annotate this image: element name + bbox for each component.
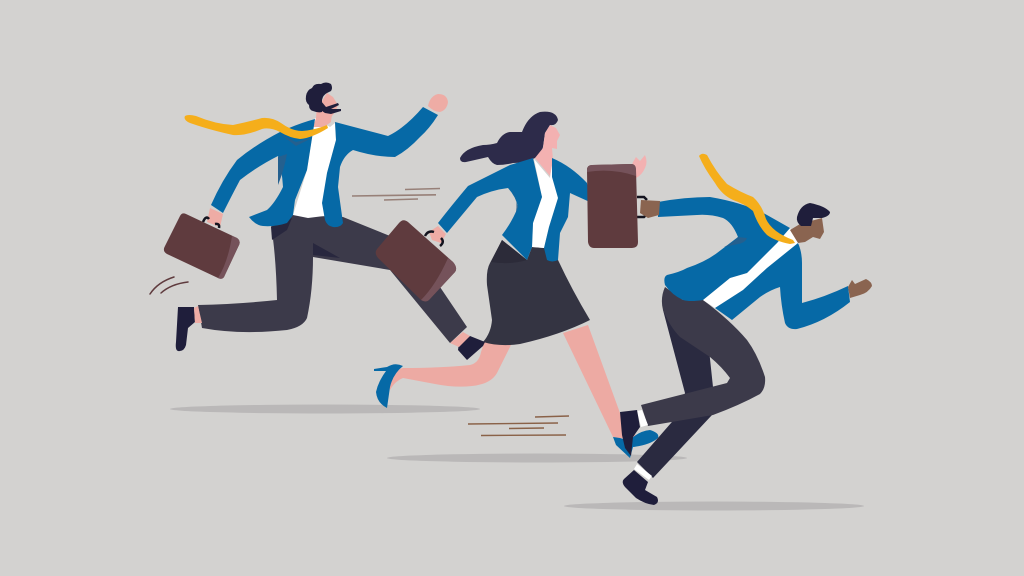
man one back shoe <box>176 307 195 351</box>
briefcase: woman <box>376 220 456 302</box>
figure: second man sprinting <box>620 154 872 505</box>
woman jacket right <box>544 158 592 262</box>
briefcase: second man <box>587 164 660 248</box>
man three sleeve fold <box>724 237 747 247</box>
man one head: face <box>318 93 338 122</box>
woman sleeve fold <box>512 188 518 218</box>
man three flying tie <box>699 154 795 244</box>
man one back ankle <box>194 306 202 323</box>
man one raised hand <box>428 94 448 112</box>
man one sleeve fold <box>278 154 287 185</box>
handle <box>637 197 647 217</box>
case <box>587 164 638 248</box>
man three lower sock <box>634 464 652 480</box>
man three front hand <box>848 279 872 298</box>
man one inner leg shade <box>313 243 340 258</box>
man three upper sock <box>637 410 648 427</box>
woman skirt <box>483 240 590 345</box>
man one neck <box>313 105 332 127</box>
woman hair <box>460 112 558 165</box>
man one ankle <box>450 332 470 347</box>
briefcase: first man <box>164 213 240 279</box>
man one trousers <box>198 215 467 343</box>
man one flying tie <box>185 115 328 139</box>
man three front leg <box>641 287 765 426</box>
woman front leg <box>563 325 637 440</box>
man one waist shade <box>271 218 292 240</box>
man three jacket lower and arm <box>715 243 850 329</box>
woman face and neck <box>535 125 560 176</box>
man three hair <box>797 203 830 226</box>
man three face and neck <box>790 218 824 243</box>
ground shadows <box>170 404 864 510</box>
man one beard <box>321 101 341 114</box>
woman raised hand <box>630 155 646 178</box>
motion lines: second runner <box>468 416 569 436</box>
man three jacket <box>658 197 790 301</box>
case <box>376 220 456 302</box>
case top band <box>587 164 636 176</box>
man three lower shoe <box>623 470 658 505</box>
man one hair <box>306 82 332 112</box>
motion swoosh lines: briefcase <box>150 277 188 294</box>
woman jacket left <box>438 158 542 260</box>
motion lines: first runner <box>352 188 440 200</box>
woman left hand <box>429 226 446 243</box>
woman shirt <box>532 159 558 248</box>
handle <box>203 218 219 228</box>
woman back shoe <box>374 364 403 408</box>
man three back leg <box>637 310 713 478</box>
man one tie shadow <box>280 134 312 146</box>
handle <box>425 232 443 246</box>
case end band <box>421 258 456 302</box>
figure: woman running <box>374 112 658 458</box>
case <box>164 213 240 279</box>
figure: first man running <box>176 82 485 360</box>
man one jacket left <box>211 119 315 226</box>
man one jacket right and arm <box>322 107 438 227</box>
case end band <box>218 236 240 279</box>
man one front shoe <box>458 336 485 360</box>
man one shirt <box>293 118 336 218</box>
woman back leg <box>388 340 511 390</box>
man three upper shoe <box>620 410 640 456</box>
man three shirt <box>703 228 799 308</box>
man one left hand <box>207 208 223 227</box>
second man rear hand <box>640 200 660 218</box>
woman front shoe <box>613 430 658 458</box>
woman waist shadow <box>491 240 527 263</box>
